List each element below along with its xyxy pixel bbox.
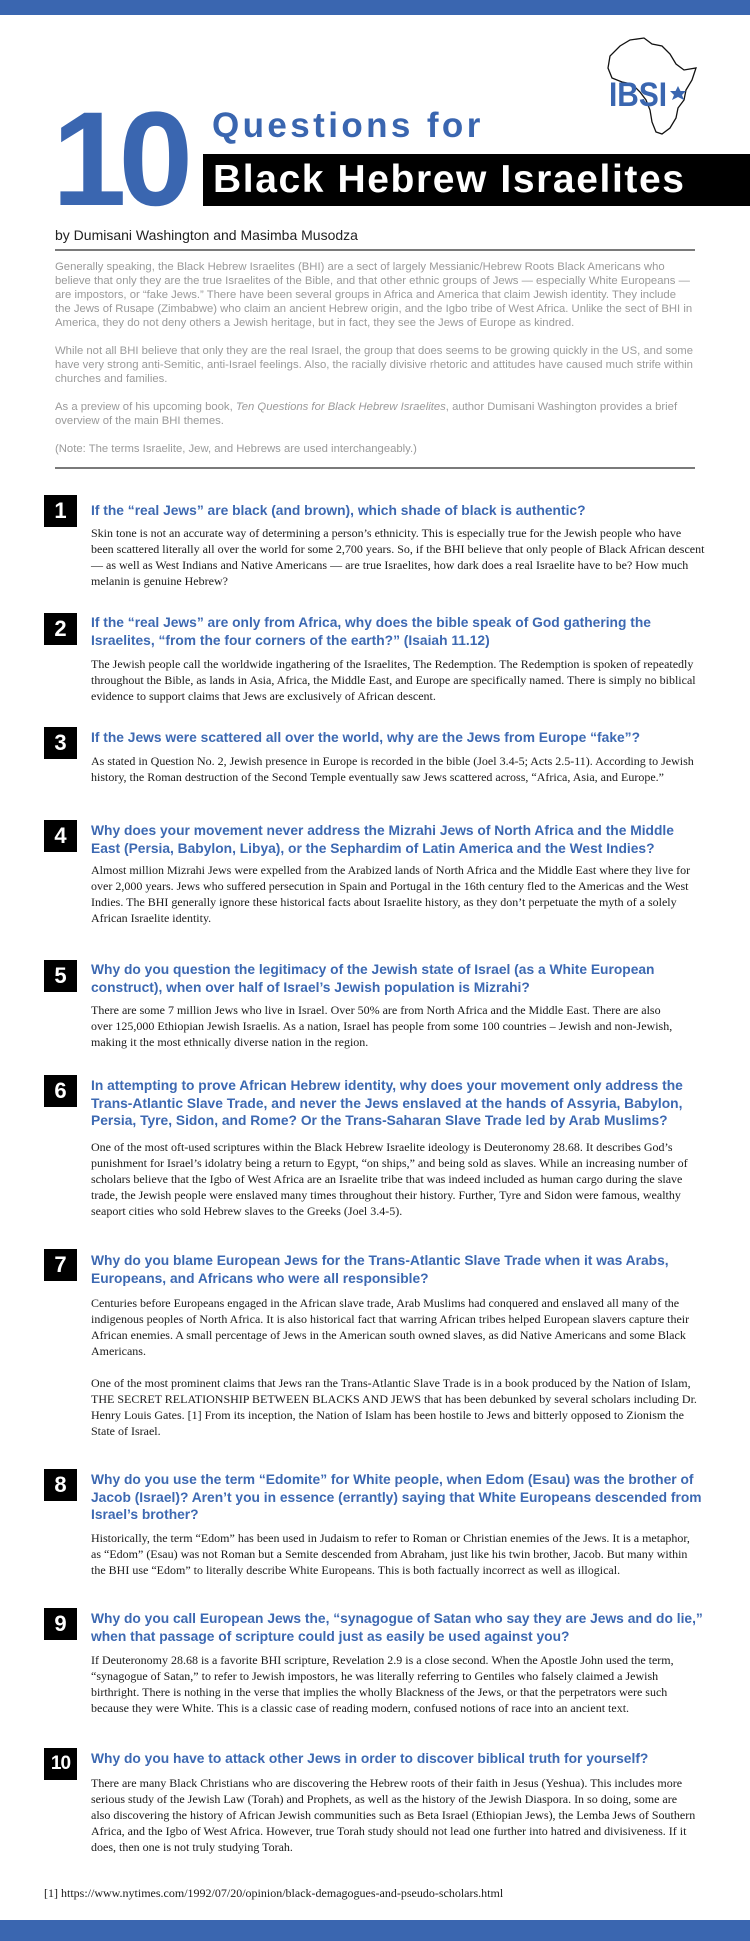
title: 10: 10: [52, 85, 185, 234]
question 10: Why do you have to attack other Jews in order to discover biblical truth for yourself?: [91, 1751, 648, 1766]
question 1: melanin is genuine Hebrew?: [91, 574, 228, 588]
question 8: as “Edom” (Esau) was not Roman but a Semite descended from Abraham, just like his twin brother, Jacob. But many within: [91, 1547, 687, 1561]
intro text: overview of the main BHI themes.: [55, 415, 224, 427]
intro text: the Jews of Rusape (Zimbabwe) who claim an ancient Hebrew origin, and the Igbo tribe of West Africa. Unlike the sect of BHI in: [55, 303, 692, 315]
question 6: trade, the Jewish people were enslaved many times throughout their history. Further, Tyre and Sidon were famous, wealthy: [91, 1188, 681, 1202]
byline: by Dumisani Washington and Masimba Musodza: [55, 227, 358, 243]
intro text: believe that only they are the true Israelites of the Bible, and that other ethnic groups of Jews — especially White Europeans —: [55, 275, 690, 287]
title: Questions for: Questions for: [212, 106, 484, 145]
question 7: State of Israel.: [91, 1424, 161, 1438]
question 4: [44, 820, 690, 925]
question 6: seaport cities who sold Hebrew slaves to the Greeks (Joel 3.4-5).: [91, 1204, 402, 1218]
question 4: East (Persia, Babylon, Libya), or the Sephardim of Latin America and the West Indies?: [91, 841, 654, 856]
question 5: 5: [54, 963, 67, 988]
question 8: the BHI use “Edom” to literally describe White Europeans. This is both factually incorrect as well as illogical.: [91, 1563, 620, 1577]
question 4: 4: [54, 823, 67, 848]
question 6: scholars believe that the Igbo of West Africa are an Israelite tribe that was indeed included as human cargo during the slave: [91, 1172, 682, 1186]
question 8: Israel’s brother?: [91, 1507, 199, 1522]
question 9: when that passage of scripture could just as easily be used against you?: [91, 1629, 569, 1644]
question 1: [44, 495, 704, 588]
question 6: Persia, Tyre, Sidon, and Rome? Or the Trans-Saharan Slave Trade led by Arab Muslims?: [91, 1113, 668, 1128]
question 3: history, the Roman destruction of the Second Temple eventually saw Jews scattered across, “Africa, Asia, and Europe.”: [91, 770, 664, 784]
question 6: [44, 1075, 688, 1218]
question 2: The Jewish people call the worldwide ingathering of the Israelites, The Redemption. The Redemption is spoken of repeatedly: [91, 657, 693, 671]
question 6: 6: [54, 1078, 67, 1103]
question 7: Why do you blame European Jews for the Trans-Atlantic Slave Trade when it was Arabs,: [91, 1253, 669, 1268]
question 4: over 2,000 years. Jews who suffered persecution in Spain and Portugal in the 16th century fled to the Americas and the West: [91, 879, 688, 893]
question 6: Trans-Atlantic Slave Trade, and never the Jews enslaved at the hands of Assyria, Babylon,: [91, 1096, 682, 1111]
question 10: There are many Black Christians who are discovering the Hebrew roots of their faith in Jesus (Yeshua). This includes more: [91, 1776, 682, 1790]
question 9: 9: [54, 1611, 67, 1636]
question 1: — as well as West Indians and Native Americans — are true Israelites, how dark does a real Israelite have to be? How much: [91, 558, 688, 572]
question 2: throughout the Bible, as lands in Asia, Africa, the Middle East, and Europe are specifically named. There is simply no biblical: [91, 673, 696, 687]
question 3: As stated in Question No. 2, Jewish presence in Europe is recorded in the bible (Joel 3.4-5; Acts 2.5-11). According to Jewish: [91, 754, 694, 768]
question 10: also discovering the history of African Jewish communities such as Beta Israel (Ethiopian Jews), the Lemba Jews of Southern: [91, 1808, 695, 1822]
question 6: punishment for Israel’s idolatry being a return to Egypt, “on ships,” and being sold as slaves. While an increasing number of: [91, 1156, 688, 1170]
question 5: There are some 7 million Jews who live in Israel. Over 50% are from North Africa and the Middle East. There are also: [91, 1003, 661, 1017]
question 8: Why do you use the term “Edomite” for White people, when Edom (Esau) was the brother of: [91, 1472, 694, 1487]
question 5: making it the most ethnically diverse nation in the region.: [91, 1035, 368, 1049]
intro text: As a preview of his upcoming book, Ten Questions for Black Hebrew Israelites, author Dumisani Washington provides a brief: [55, 401, 677, 413]
question 7: THE SECRET RELATIONSHIP BETWEEN BLACKS AND JEWS that has been debunked by several scholars including Dr.: [91, 1392, 697, 1406]
question 8: Jacob (Israel)? Aren’t you in essence (errantly) saying that White Europeans descended from: [91, 1490, 702, 1505]
question 1: been scattered literally all over the world for some 2,700 years. So, if the BHI believe that only people of Black African descent: [91, 542, 704, 556]
question 5: construct), when over half of Israel’s Jewish population is Mizrahi?: [91, 980, 530, 995]
intro text: have very strong anti-Semitic, anti-Israel feelings. Also, the racially divisive rhetoric and attitudes have caused much strife within: [55, 359, 693, 371]
question 9: “synagogue of Satan,” to refer to Jewish impostors, he was literally referring to Gentiles who falsely claimed a Jewish: [91, 1669, 658, 1683]
question 5: [44, 960, 672, 1049]
question 2: [44, 613, 696, 703]
question 4: Why does your movement never address the Mizrahi Jews of North Africa and the Middle: [91, 823, 674, 838]
intro text: [55, 261, 693, 455]
question 4: Indies. The BHI generally ignore these historical facts about Israelite history, as they don’t perpetuate the myth of a solely: [91, 895, 677, 909]
title: Black Hebrew Israelites bar: Black Hebrew Israelites: [213, 158, 686, 201]
intro text: While not all BHI believe that only they are the real Israel, the group that does seems to be growing quickly in the US, and some: [55, 345, 693, 357]
intro text: are impostors, or “fake Jews.” There have been several groups in Africa and America that claim Jewish identity. They include: [55, 289, 676, 301]
question 8: [44, 1469, 702, 1577]
question 1: If the “real Jews” are black (and brown), which shade of black is authentic?: [91, 503, 586, 518]
question 7: Centuries before Europeans engaged in the African slave trade, Arab Muslims had conquered and enslaved all many of the: [91, 1296, 679, 1310]
question 2: If the “real Jews” are only from Africa, why does the bible speak of God gathering the: [91, 615, 651, 630]
intro text: America, they do not deny others a Jewish heritage, but in fact, they see the Jews of Europe as kindred.: [55, 317, 574, 329]
question 1: Skin tone is not an accurate way of determining a person’s ethnicity. This is especially true for the Jewish people who have: [91, 526, 681, 540]
question 7: Europeans, and Africans who were all responsible?: [91, 1271, 429, 1286]
question 9: because they were White. This is a classic case of reading modern, confused notions of race into an ancient text.: [91, 1701, 629, 1715]
question 9: If Deuteronomy 28.68 is a favorite BHI scripture, Revelation 2.9 is a close second. When the Apostle John used the term,: [91, 1653, 674, 1667]
top bar: [0, 0, 750, 15]
question 7: African enemies. A small percentage of Jews in the American south owned slaves, as did Native Americans and some Black: [91, 1328, 686, 1342]
question 2: Israelites, “from the four corners of the earth?” (Isaiah 11.12): [91, 633, 490, 648]
intro text: Generally speaking, the Black Hebrew Israelites (BHI) are a sect of largely Messianic/Hebrew Roots Black Americans who: [55, 261, 665, 273]
logo: IBSI Africa: IBSI: [609, 76, 667, 114]
question 3: [44, 727, 694, 784]
question 4: African Israelite identity.: [91, 911, 211, 925]
question 10: Africa, and the Igbo of West Africa. However, true Torah study should not lead one further into hatred and divisiveness. If it: [91, 1824, 686, 1838]
question 10: does, then one is not truly studying Torah.: [91, 1840, 293, 1854]
question 7: 7: [54, 1252, 67, 1277]
question 5: over 125,000 Ethiopian Jewish Israelis. As a nation, Israel has people from some 100 countries – Jewish and non-Jewish,: [91, 1019, 672, 1033]
question 5: Why do you question the legitimacy of the Jewish state of Israel (as a White European: [91, 962, 654, 977]
footnote: [1] https://www.nytimes.com/1992/07/20/opinion/black-demagogues-and-pseudo-scholars.html: [44, 1886, 503, 1900]
bottom bar: [0, 1920, 750, 1941]
question 10: serious study of the Jewish Law (Torah) and Prophets, as well as the history of the Jewish Diaspora. In so doing, some are: [91, 1792, 677, 1806]
question 4: Almost million Mizrahi Jews were expelled from the Arabized lands of North Africa and the Middle East where they live for: [91, 863, 690, 877]
question 7: [44, 1249, 697, 1438]
question 8: Historically, the term “Edom” has been used in Judaism to refer to Roman or Christian enemies of the Jews. It is a metaphor,: [91, 1531, 690, 1545]
question 10: [44, 1748, 696, 1854]
question 7: Americans.: [91, 1344, 146, 1358]
question 6: One of the most oft-used scriptures within the Black Hebrew Israelite ideology is Deuteronomy 28.68. It describes God’s: [91, 1140, 673, 1154]
intro text: (Note: The terms Israelite, Jew, and Hebrews are used interchangeably.): [55, 443, 417, 455]
question 9: birthright. There is nothing in the verse that implies the wholly Blackness of the Jews, or that the perpetrators were such: [91, 1685, 667, 1699]
question 3: 3: [54, 730, 67, 755]
question 2: evidence to support claims that Jews are exclusively of African descent.: [91, 689, 436, 703]
intro text: churches and families.: [55, 373, 167, 385]
question 10: 10: [51, 1753, 70, 1774]
question 7: Henry Louis Gates. [1] From its inception, the Nation of Islam has been hostile to Jews and bitterly opposed to Zionism the: [91, 1408, 684, 1422]
question 3: If the Jews were scattered all over the world, why are the Jews from Europe “fake”?: [91, 730, 640, 745]
question 7: One of the most prominent claims that Jews ran the Trans-Atlantic Slave Trade is in a book produced by the Nation of Islam,: [91, 1376, 691, 1390]
question 2: 2: [54, 616, 67, 641]
question 9: [44, 1608, 703, 1715]
question 6: In attempting to prove African Hebrew identity, why does your movement only address the: [91, 1078, 683, 1093]
question 8: 8: [54, 1472, 67, 1497]
logo: IBSI Africa: [607, 37, 697, 135]
question 7: indigenous peoples of North Africa. It is also historical fact that warring African tribes helped European slavers capture their: [91, 1312, 689, 1326]
question 1: 1: [54, 498, 67, 523]
question 9: Why do you call European Jews the, “synagogue of Satan who say they are Jews and do lie,”: [91, 1611, 703, 1626]
